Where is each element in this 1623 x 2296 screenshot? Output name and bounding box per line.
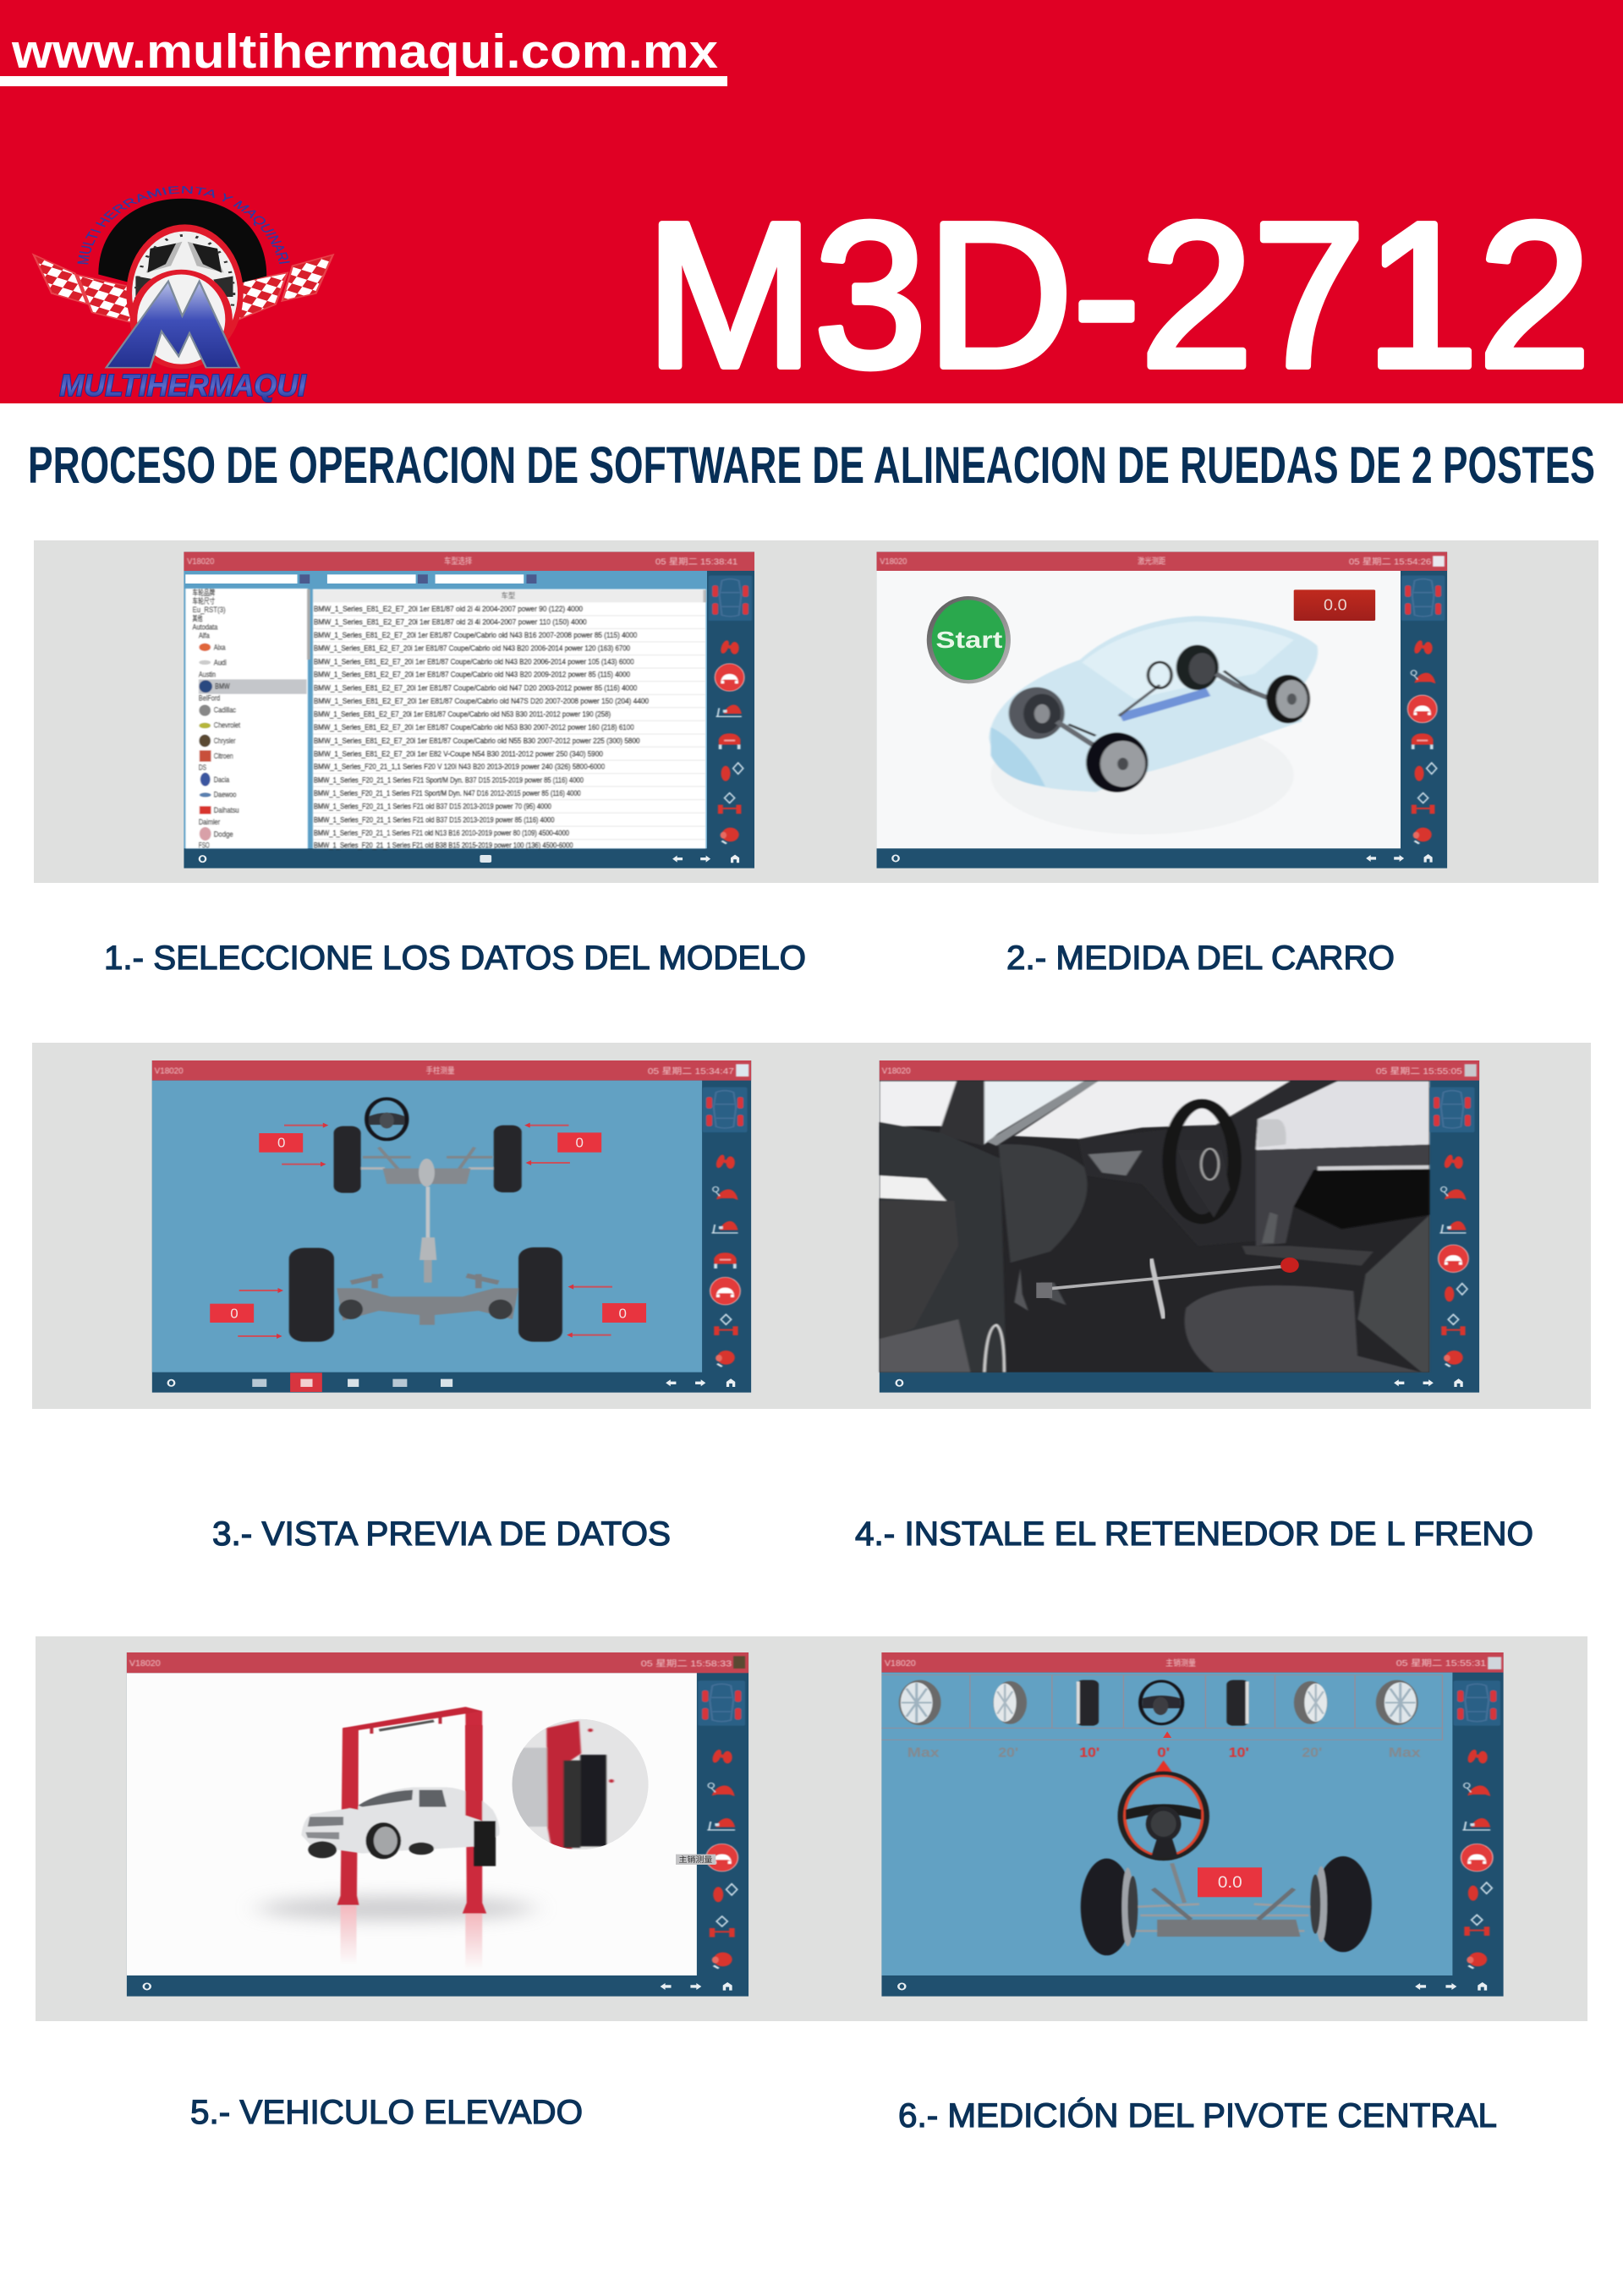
sidebar icons <box>698 1680 745 1969</box>
brand list: Chevrolet <box>214 721 240 730</box>
title bar text <box>882 1064 1477 1077</box>
bottom bar icons <box>898 1982 1487 1991</box>
model table: BMW_1_Series_F20_21_1 Series F21 old B37 D15 2013-2019 power 85 (116) 4000 <box>314 816 555 825</box>
model table: BMW_1_Series_F20_21_1 Series F21 old N13 B16 2010-2019 power 80 (109) 4500-4000 <box>314 829 569 837</box>
logo: Multihermaqui <box>32 186 335 403</box>
logo wordmark: MULTIHERMAQUI <box>59 369 307 403</box>
step label 1: 1.- SELECCIONE LOS DATOS DEL MODELO <box>104 940 806 977</box>
step label 6: 6.- MEDICIÓN DEL PIVOTE CENTRAL <box>898 2096 1497 2134</box>
reading box <box>1294 589 1375 621</box>
title bar text: 05 星期二 15:58:33 <box>641 1659 732 1669</box>
step label 3: 3.- VISTA PREVIA DE DATOS <box>212 1515 671 1553</box>
panel: row 3 background <box>36 1636 1587 2021</box>
brand list: Aixa <box>214 644 226 652</box>
screen 1: model data selection <box>184 552 754 869</box>
brake retainer rod <box>1036 1258 1299 1318</box>
model table: BMW_1_Series_E81_E2_E7_20i 1er E81/87 Coupe/Cabrio old N53 B30 2007-2012 power 160 (218) 6100 <box>314 724 634 732</box>
angle labels: Max <box>1389 1745 1421 1760</box>
step label 5: 5.- VEHICULO ELEVADO <box>190 2094 583 2131</box>
model table: BMW_1_Series_F20_21_1,1 Series F20 V 120i N43 B20 2013-2019 power 240 (326) 5800-6000 <box>314 763 605 771</box>
title bar text <box>187 556 738 567</box>
title bar text: V18020 <box>155 1066 184 1076</box>
title bar text: V18020 <box>187 556 215 566</box>
website underline <box>0 76 727 86</box>
reading values: 0 <box>230 1306 239 1321</box>
logo flags <box>34 255 333 323</box>
steering scale grid <box>881 1675 1442 1740</box>
website address: www.multihermaqui.com.mx <box>11 25 718 79</box>
floor shadow <box>257 1897 535 1921</box>
sidebar icons <box>1401 576 1445 844</box>
title bar text: 05 星期二 15:55:31 <box>1396 1658 1486 1668</box>
brand list: Daewoo <box>214 791 236 799</box>
title bar text: V18020 <box>885 1658 916 1668</box>
model table: BMW_1_Series_F20_21_1 Series F21 Sport/M Dyn. B37 D15 2015-2019 power 85 (116) 4000 <box>314 776 584 785</box>
sidebar icons <box>1453 1680 1500 1969</box>
reading box: 0.0 <box>1324 596 1347 614</box>
reading values: 0 <box>618 1306 627 1321</box>
angle labels: 10' <box>1079 1745 1099 1760</box>
model table: BMW_1_Series_E81_E2_E7_20i 1er E81/87 Coupe/Cabrio old N53 B30 2011-2012 power 190 (258) <box>314 710 611 719</box>
brand list: Chrysler <box>214 737 236 745</box>
title bar text: 05 星期二 15:55:05 <box>1376 1066 1462 1076</box>
angle labels: 0' <box>1157 1745 1170 1760</box>
detail inset <box>510 1719 649 1849</box>
two-post lift <box>337 1707 486 1970</box>
reading boxes <box>210 1132 646 1323</box>
panel: row 1 background <box>34 540 1598 883</box>
front axle illustration <box>1081 1856 1372 1955</box>
title bar text <box>129 1656 745 1669</box>
brand list: Daimler <box>199 818 220 826</box>
reading box: 0.0 <box>1218 1873 1242 1892</box>
sidebar icons <box>1430 1088 1474 1367</box>
screen 3: data preview <box>152 1060 751 1393</box>
brand list: Daihatsu <box>214 806 239 814</box>
model table: BMW_1_Series_E81_E2_E7_20i 1er E82 V-Coupe N54 B30 2011-2012 power 250 (340) 5900 <box>314 750 603 759</box>
brand list: Cadillac <box>214 706 236 715</box>
angle labels: 10' <box>1229 1745 1249 1760</box>
brand list: Alfa <box>199 632 210 640</box>
brand list: Austin <box>199 671 216 679</box>
brand list: Dacia <box>214 775 230 784</box>
title bar text <box>880 556 1445 567</box>
brand list: Eu_RST(3) <box>193 606 226 614</box>
brand list: Citroen <box>214 752 233 760</box>
start button <box>927 596 1011 683</box>
start button: Start <box>935 627 1002 653</box>
title bar text <box>155 1064 748 1077</box>
model table: BMW_1_Series_E81_E2_E7_20i 1er E81/87 old 2i 4i 2004-2007 power 110 (150) 4000 <box>314 618 587 627</box>
brand list: Audi <box>214 659 227 667</box>
logo arc text <box>88 194 281 269</box>
title bar text: 05 星期二 15:54:26 <box>1349 557 1432 567</box>
header band <box>0 0 1623 410</box>
brand list: BMW <box>215 682 230 691</box>
model table: BMW_1_Series_E81_E2_E7_20i 1er E81/87 Coupe/Cabrio old N43 B16 2007-2008 power 85 (115) 4000 <box>314 632 637 639</box>
title bar text: 05 星期二 15:38:41 <box>655 557 738 567</box>
search fields <box>185 574 536 584</box>
brand list: BelFord <box>199 694 220 703</box>
car interior illustration <box>880 1081 1429 1373</box>
model table: BMW_1_Series_F20_21_1 Series F21 Sport/M Dyn. N47 D16 2012-2015 power 85 (116) 4000 <box>314 789 581 797</box>
model table: BMW_1_Series_F20_21_1 Series F21 old B37 D15 2013-2019 power 70 (95) 4000 <box>314 803 551 811</box>
tooltip: 主销测量 <box>678 1855 712 1864</box>
brand list: 车轮品牌 <box>193 588 215 597</box>
wheel row <box>899 1680 1418 1726</box>
sidebar icons <box>703 1088 747 1367</box>
model table <box>313 589 706 850</box>
bottom bar icons <box>896 1378 1463 1387</box>
model table: BMW_1_Series_F20_21_1 Series F21 old B38 B15 2015-2019 power 100 (136) 4500-6000 <box>314 841 573 850</box>
title bar text: V18020 <box>880 556 907 566</box>
reading values: 0 <box>576 1136 584 1151</box>
title bar text: V18020 <box>882 1066 911 1076</box>
step label 4: 4.- INSTALE EL RETENEDOR DE L FRENO <box>855 1515 1533 1553</box>
car illustration <box>989 616 1318 835</box>
brand list: Autodata <box>193 623 218 632</box>
screen 6: kingpin measurement <box>881 1652 1504 1997</box>
logo tire <box>98 199 266 287</box>
brand list: DS <box>199 764 206 772</box>
logo M mark <box>107 272 239 368</box>
title bar text <box>885 1657 1501 1669</box>
angle labels <box>907 1745 1421 1760</box>
angle labels: Max <box>907 1745 940 1760</box>
bottom bar icons <box>144 1982 732 1991</box>
angle labels: 20' <box>1302 1745 1322 1760</box>
model table: BMW_1_Series_E81_E2_E7_20i 1er E81/87 Coupe/Cabrio old N43 B20 2006-2014 power 120 (163) 6700 <box>314 644 630 653</box>
sidebar icons <box>709 576 752 844</box>
screen 4: brake retainer installation <box>880 1060 1479 1393</box>
panel: row 2 background <box>32 1043 1591 1409</box>
title bar text: 车型选择 <box>444 556 472 566</box>
small pointer <box>1163 1731 1171 1738</box>
reading values <box>230 1136 627 1321</box>
brand list: FSO <box>199 841 210 850</box>
model table: BMW_1_Series_E81_E2_E7_20i 1er E81/87 Coupe/Cabrio old N43 B20 2006-2014 power 105 (143) 6000 <box>314 658 634 666</box>
tooltip <box>676 1855 716 1865</box>
title bar text: V18020 <box>129 1658 161 1668</box>
title bar text: 05 星期二 15:34:47 <box>648 1066 734 1076</box>
angle labels: 20' <box>998 1745 1018 1760</box>
lifted car <box>301 1725 500 1866</box>
model table: BMW_1_Series_E81_E2_E7_20i 1er E81/87 old 2i 4i 2004-2007 power 90 (122) 4000 <box>314 606 583 613</box>
arrows <box>238 1123 612 1339</box>
model table: BMW_1_Series_E81_E2_E7_20i 1er E81/87 Coupe/Cabrio old N47S D20 2007-2008 power 150 (204) 4400 <box>314 698 649 705</box>
model table: BMW_1_Series_E81_E2_E7_20i 1er E81/87 Coupe/Cabrio old N55 B30 2007-2012 power 225 (300) 5800 <box>314 737 640 745</box>
axle illustration <box>289 1099 562 1342</box>
title bar text: 主销测量 <box>1165 1658 1196 1668</box>
step label 2: 2.- MEDIDA DEL CARRO <box>1006 940 1395 977</box>
bottom bar icons <box>200 855 739 863</box>
screen 2: car measurement <box>877 552 1447 869</box>
model table: BMW_1_Series_E81_E2_E7_20i 1er E81/87 Coupe/Cabrio old N43 B20 2009-2012 power 85 (115) 4000 <box>314 671 630 679</box>
title bar text: 手柱测量 <box>426 1066 455 1076</box>
reading values: 0 <box>277 1136 286 1151</box>
brand list: 其他 <box>193 614 203 623</box>
steering wheel with pointer <box>1121 1761 1206 1859</box>
model table: BMW_1_Series_E81_E2_E7_20i 1er E81/87 Coupe/Cabrio old N47 D20 2003-2012 power 85 (116) 4000 <box>314 684 637 693</box>
brand list: Dodge <box>214 830 233 839</box>
logo wheel <box>126 224 244 363</box>
brand list <box>185 588 310 850</box>
bottom bar icons and tabs <box>168 1373 735 1392</box>
title bar text: 激光测距 <box>1138 556 1165 566</box>
model number: M3D-2712 <box>645 179 1591 410</box>
model table: 车型 <box>502 591 515 600</box>
bottom bar icons <box>892 854 1433 863</box>
reading box <box>1198 1867 1262 1897</box>
screen 5: vehicle lifted <box>127 1652 748 1997</box>
brand list: 车轮尺寸 <box>193 596 215 606</box>
